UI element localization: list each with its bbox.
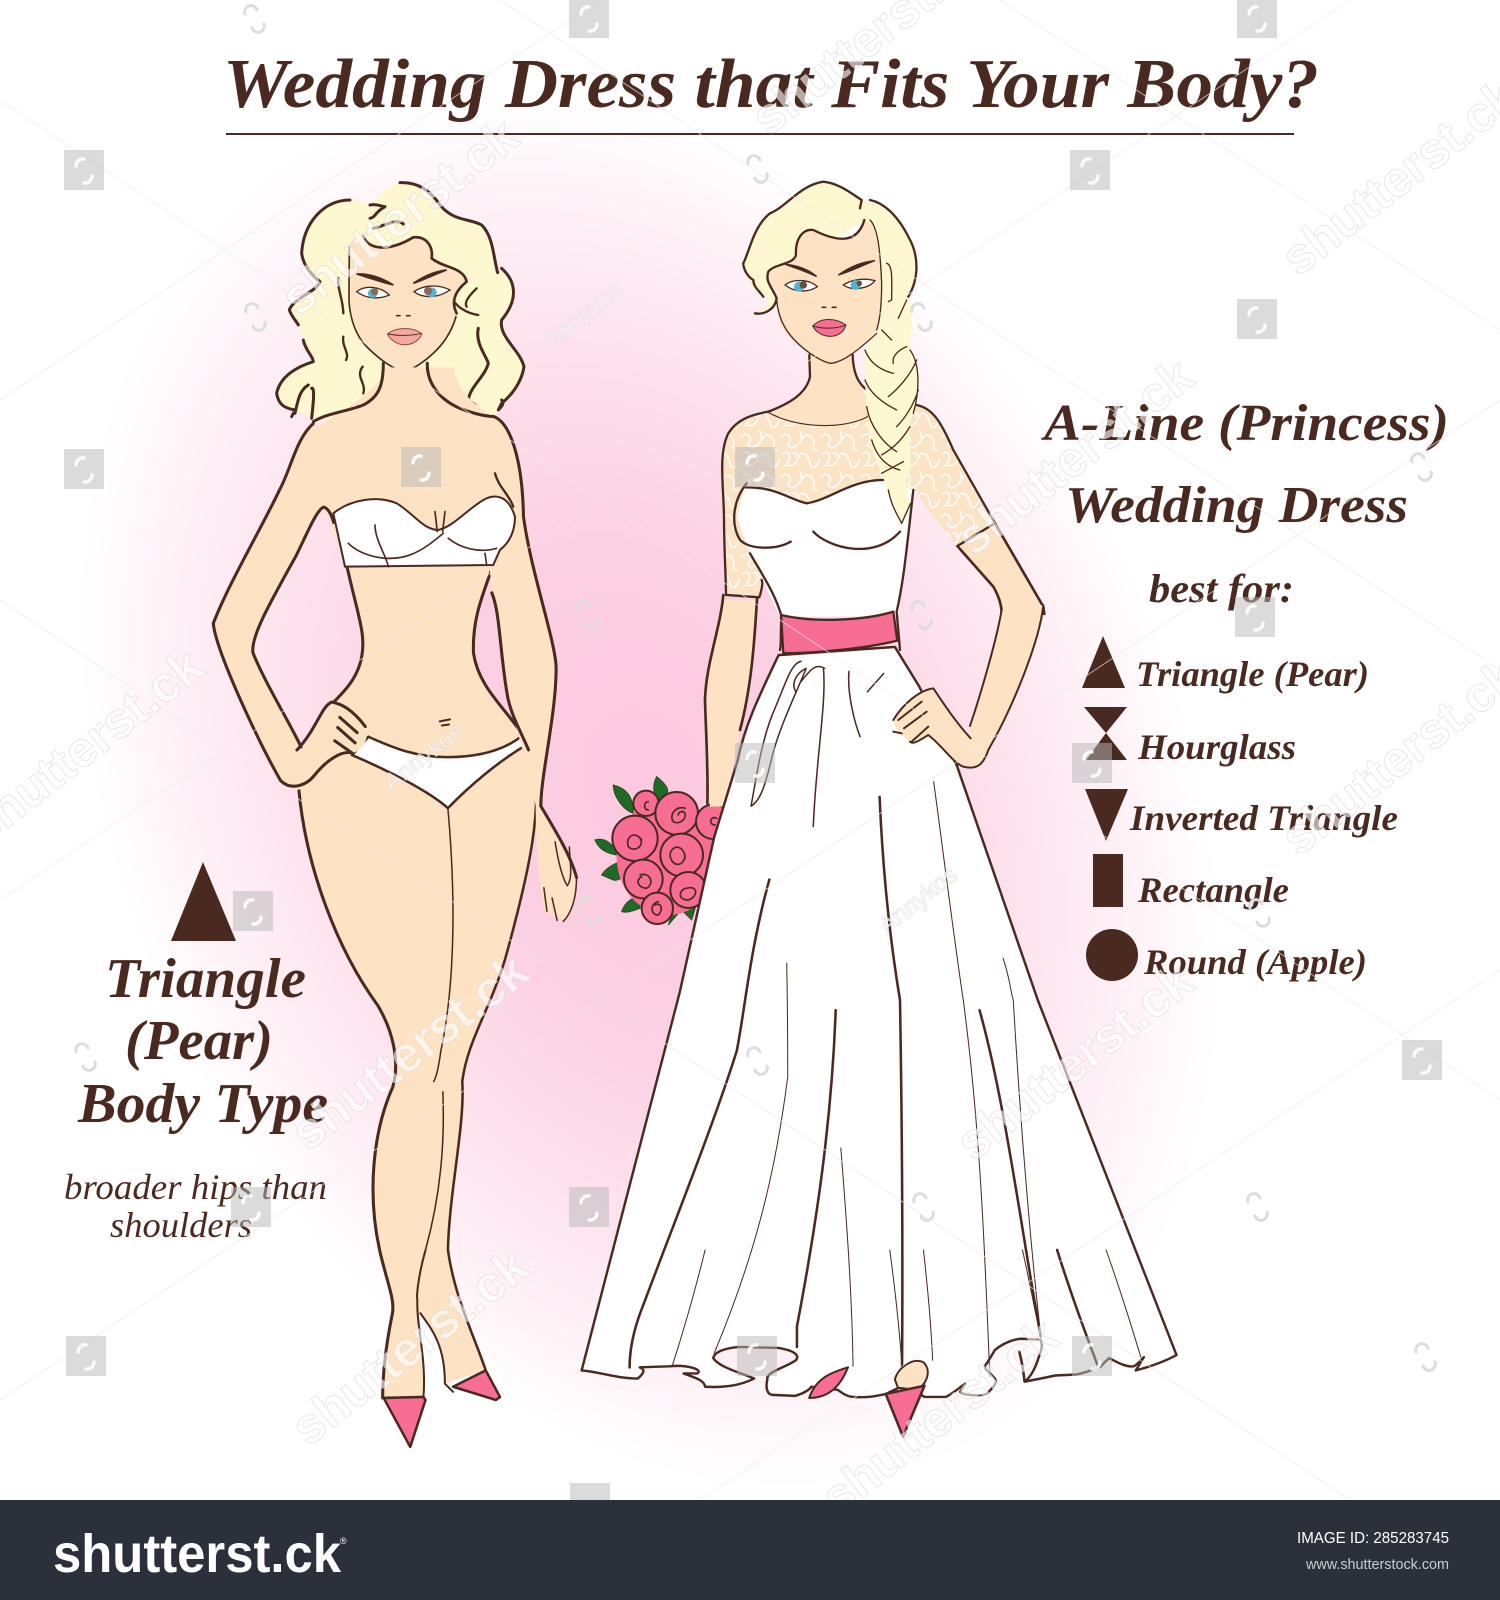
dress skirt	[582, 647, 1177, 1437]
heading: triangle: Triangle	[105, 948, 306, 1010]
watermark overlay: shutterst.ck	[811, 1307, 1069, 1526]
bouquet backing	[617, 798, 720, 915]
heading: wedding dress: Wedding Dress	[1065, 477, 1408, 534]
item: inverted triangle	[1085, 789, 1398, 841]
watermark overlay: Annykos	[874, 861, 963, 939]
panel: body type label	[64, 862, 328, 1245]
footer bar	[0, 1500, 1500, 1600]
watermark overlay: shutterst.ck	[946, 952, 1204, 1171]
roses	[612, 791, 731, 924]
heading: pear: (Pear)	[125, 1010, 273, 1072]
item: inverted triangle: Inverted Triangle	[1129, 798, 1398, 838]
item: round: Round (Apple)	[1143, 942, 1367, 982]
hair and face	[277, 183, 524, 420]
subheading: best for: best for:	[1149, 566, 1294, 611]
bodice, sash, head	[722, 182, 995, 653]
nose and lips	[822, 305, 836, 310]
eyes	[357, 270, 447, 285]
icon: triangle	[171, 862, 236, 941]
rose spirals	[628, 802, 717, 915]
face	[348, 235, 467, 372]
navel	[440, 719, 450, 726]
hair outline	[743, 182, 916, 314]
description line one: broader hips than	[64, 1167, 327, 1207]
item: triangle	[1082, 636, 1369, 694]
watermark overlay: shutterst.ck	[946, 347, 1204, 566]
shoe: front	[384, 1397, 426, 1447]
bra	[333, 497, 515, 567]
watermark overlay: shutterst.ck	[281, 942, 539, 1161]
heading: A-line: A-Line (Princess)	[1041, 395, 1449, 452]
shoe: back	[453, 1370, 500, 1400]
watermark overlay: Annykos	[540, 275, 629, 353]
footer registered mark: ®	[340, 1536, 347, 1546]
back shoe	[809, 1367, 848, 1398]
item: hourglass: Hourglass	[1137, 727, 1296, 767]
item: rectangle	[1093, 854, 1289, 910]
neck lines, facial features and bra	[313, 270, 515, 567]
neck lines	[313, 363, 493, 422]
dress lines	[722, 405, 995, 650]
neck	[768, 350, 870, 425]
description line two: shoulders	[110, 1205, 252, 1245]
skirt fold lines	[630, 797, 1098, 1367]
figure: bride in A-line dress	[582, 182, 1177, 1437]
item: round	[1086, 929, 1367, 982]
item: triangle: Triangle (Pear)	[1136, 654, 1369, 694]
face	[767, 220, 882, 363]
hair	[743, 182, 918, 523]
nose and lips	[397, 313, 410, 318]
hair	[277, 183, 524, 420]
heading: body type: Body Type	[77, 1073, 328, 1135]
bouquet	[595, 777, 731, 925]
figure: woman in underwear	[213, 183, 577, 1447]
footer url: www.shutterstock.com	[1305, 1556, 1449, 1573]
item: hourglass	[1084, 707, 1296, 767]
watermark overlay: shutterst.ck	[271, 107, 529, 326]
white bodice	[733, 480, 915, 617]
watermark overlay: Annykos	[379, 718, 468, 796]
title underline	[226, 133, 1294, 135]
eyes	[785, 261, 875, 277]
arm: left with hand on hip	[213, 423, 367, 786]
panties	[352, 735, 527, 808]
sash	[781, 612, 897, 653]
panel: dress label	[1041, 395, 1449, 982]
item: rectangle: Rectangle	[1137, 870, 1289, 910]
footer image id: IMAGE ID: 285283745	[1297, 1530, 1449, 1547]
arm: right hanging	[480, 416, 577, 921]
chin line	[777, 300, 877, 363]
title: Wedding Dress that Fits Your Body?	[223, 46, 1319, 123]
right upper arm	[957, 523, 1045, 650]
leaves	[595, 777, 697, 925]
body: torso and legs	[213, 367, 577, 1447]
right forearm and hand outline	[893, 605, 1043, 768]
left arm	[705, 595, 758, 807]
watermark overlay: shutterst.ck	[281, 1237, 539, 1456]
front shoe and foot	[895, 1361, 928, 1390]
lace yoke and sleeves	[722, 405, 995, 597]
footer logo: shutterst.ck	[53, 1524, 342, 1584]
